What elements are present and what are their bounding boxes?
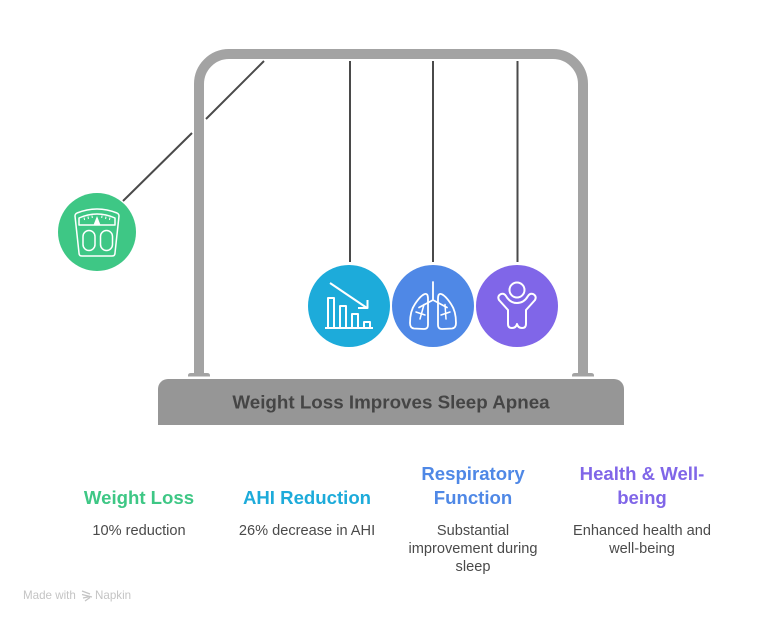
watermark: Napkin	[95, 589, 131, 602]
heading	[421, 463, 525, 508]
heading: Health & Well-	[580, 463, 704, 484]
description: well-being	[609, 541, 675, 557]
heading: being	[617, 487, 667, 508]
frame	[188, 54, 594, 376]
icon: falling bar chart	[308, 265, 390, 347]
description: Substantial	[437, 523, 509, 539]
heading: Function	[434, 487, 512, 508]
base	[158, 379, 624, 425]
description: sleep	[456, 559, 490, 575]
base title: Weight Loss Improves Sleep Apnea	[232, 392, 550, 412]
icon: weight scale	[58, 193, 136, 271]
label: AHI reduction	[239, 487, 375, 539]
description: 26% decrease in AHI	[239, 523, 375, 539]
heading: Respiratory	[421, 463, 525, 484]
label: respiratory function	[408, 463, 537, 575]
watermark	[23, 589, 131, 602]
heading: Weight Loss	[84, 487, 194, 508]
icon: lungs	[392, 265, 474, 347]
watermark: Made with	[23, 589, 76, 602]
heading	[580, 463, 704, 508]
label: weight loss	[84, 487, 194, 539]
icon: person with raised arms	[476, 265, 558, 347]
description: 10% reduction	[92, 523, 186, 539]
napkin logo mark	[82, 591, 92, 601]
description	[408, 523, 537, 575]
description: improvement during	[408, 541, 537, 557]
pendulum strings	[123, 61, 518, 262]
heading: AHI Reduction	[243, 487, 371, 508]
description: Enhanced health and	[573, 523, 711, 539]
description	[573, 523, 711, 557]
label: health and well-being	[573, 463, 711, 557]
